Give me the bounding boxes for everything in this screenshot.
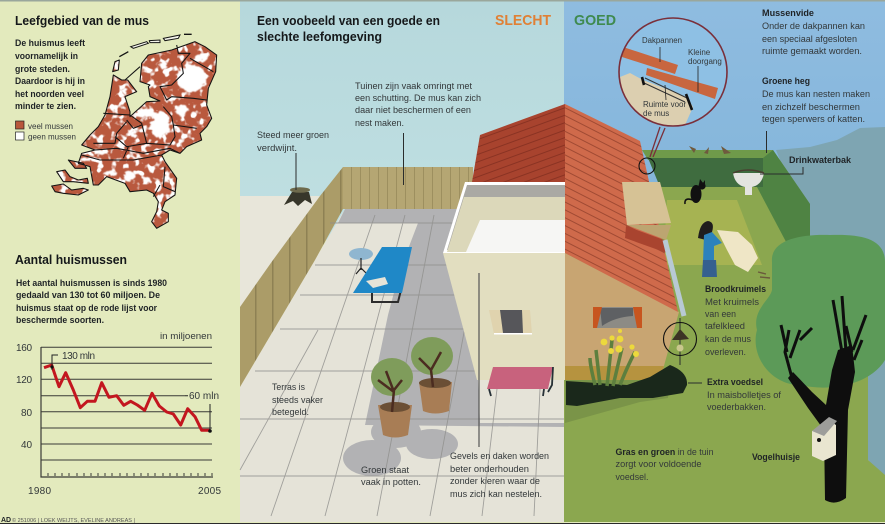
trunk and branches (781, 296, 866, 503)
y-axis labels: 40 (21, 440, 32, 451)
annotation: 130 mln (50, 351, 95, 370)
left roof (472, 104, 565, 182)
note: steed meer groen: Steed meer groen (257, 130, 329, 140)
house shadow on terrace (338, 209, 565, 427)
panel: leefgebied map (15, 13, 223, 233)
note: mussenvide: Onder de dakpannen kan (762, 21, 865, 31)
grid and axes (41, 347, 213, 477)
x-axis labels (28, 486, 221, 497)
sparrows on hedge (689, 146, 731, 154)
label: Ruimte voor de mus: Ruimte voor (643, 100, 686, 109)
label: vogelhuisje: Vogelhuisje (752, 452, 800, 462)
intro text: minder te zien. (15, 101, 76, 111)
right wall (565, 253, 679, 380)
pink bench (487, 367, 553, 396)
woman shaking tablecloth (698, 221, 758, 277)
right roof (565, 104, 678, 312)
magnifier: mussenvide detail (619, 18, 727, 174)
intro text: grote steden. (15, 64, 70, 74)
note: schutting: daar niet beschermen of een (355, 105, 471, 115)
label: Kleine doorgang: doorgang (688, 57, 722, 66)
note: mussenvide: Mussenvide (762, 8, 814, 18)
note: schutting: een schutting. De mus kan zich (355, 93, 481, 103)
left wall (443, 253, 565, 380)
note: groen in potten: vaak in potten. (361, 477, 421, 487)
note: gras en groen: zorgt voor voldoende (616, 459, 702, 469)
flat roof skylight (466, 220, 565, 252)
feeder circle with bird (664, 322, 696, 356)
note: broodkruimels: van een (705, 309, 736, 319)
chart intro text (16, 278, 167, 325)
note: gras en groen (616, 447, 714, 482)
red population line (44, 365, 210, 430)
flat roof grey band (447, 185, 565, 250)
annotation: 60 mln (185, 391, 219, 433)
hedge side (757, 150, 810, 255)
intro text: De huismus leeft (15, 38, 85, 48)
note: terras: Terras is (272, 382, 305, 392)
legend: veel mussen (28, 122, 73, 131)
potted tree 1 (371, 358, 413, 438)
x-axis labels: 1980 (28, 486, 51, 497)
note: terras: betegeld. (272, 407, 309, 417)
top edge (0, 0, 885, 2)
legend: geen mussen (28, 132, 76, 142)
note: extra voedsel (707, 377, 782, 412)
lawn ground (564, 187, 885, 522)
sky: goed side (564, 0, 885, 300)
x-axis labels: 2005 (198, 486, 221, 497)
wall plinth (565, 366, 664, 380)
line chart (16, 331, 221, 497)
label: GOED: GOED (574, 12, 616, 29)
pot shadows (343, 416, 458, 476)
flat roof floor (447, 197, 565, 252)
intro text: voornamelijk in (15, 51, 78, 61)
inner lawn (663, 200, 762, 265)
tile joints (240, 215, 565, 516)
hedge top (642, 150, 810, 235)
lens background (619, 18, 727, 126)
right window (593, 307, 642, 328)
annotation: 60 mln: 60 mln (189, 391, 219, 402)
note: terras: steeds vaker (272, 395, 323, 405)
lens contents (620, 47, 718, 126)
note: groene heg (762, 76, 870, 124)
bottom edge (0, 523, 885, 524)
note: schutting (355, 81, 481, 128)
note: mussenvide: een speciaal afgesloten (762, 34, 857, 44)
note: gevels en daken: mus zich kan nestelen. (450, 489, 542, 499)
y-axis labels: 120 (16, 375, 32, 386)
note: extra voedsel: voederbakken. (707, 402, 766, 412)
note: extra voedsel: Extra voedsel (707, 377, 763, 387)
note: broodkruimels: kan de mus (705, 334, 751, 344)
black flower bed (566, 365, 687, 406)
black cat (685, 179, 706, 204)
note: broodkruimels: Broodkruimels (705, 284, 766, 294)
heading: goede en slechte leefomgeving: Een voobeeld van een goede en (257, 13, 440, 28)
lens stem (650, 127, 665, 157)
ground beyond the fence (240, 196, 325, 310)
label: SLECHT: SLECHT (495, 12, 551, 29)
map of the Netherlands (47, 33, 223, 233)
chart intro text: gedaald van 130 tot 60 miljoen. De (16, 290, 160, 300)
note: broodkruimels: Met kruimels (705, 297, 760, 307)
dormer shadow (625, 226, 667, 253)
panel: aantal huismussen (15, 252, 221, 497)
intro text: Daardoor is hij in (15, 76, 85, 86)
potted tree 2 (411, 337, 453, 414)
chart intro text: beschermde soorten. (16, 315, 104, 325)
note: mussenvide (762, 8, 865, 56)
heading: goede en slechte leefomgeving: slechte leefomgeving (257, 29, 382, 44)
annotation: 130 mln: 130 mln (62, 351, 95, 362)
legend (16, 121, 76, 142)
note: groene heg: Groene heg (762, 76, 810, 86)
note: gevels en daken (450, 451, 549, 499)
tree with nest box (756, 235, 885, 503)
lens rim (619, 18, 727, 126)
garden shadow of house (565, 380, 670, 423)
y-axis labels (16, 343, 32, 451)
note: groene heg: De mus kan nesten maken (762, 89, 870, 99)
credit line: AD (1, 517, 11, 524)
note: groen in potten (361, 465, 421, 487)
credit line: © 251006 | LOEK WEIJTS, EVELINE ANDREAS | (12, 517, 135, 524)
panel: slecht garden scene (240, 167, 565, 522)
small detail circle (639, 158, 655, 174)
hedge front (648, 158, 763, 187)
intro text: het noorden veel (15, 89, 84, 99)
leader lines (296, 131, 803, 447)
daffodils (590, 329, 639, 386)
side table (349, 248, 373, 274)
note: gras en groen: voedsel. (616, 472, 648, 482)
panel: left column background (0, 0, 241, 524)
flat roof white border (443, 182, 565, 253)
note: gevels en daken: zonder kieren waar de (450, 476, 540, 486)
note: groene heg: en zichzelf beschermen (762, 102, 860, 112)
note: schutting: Tuinen zijn vaak omringt met (355, 81, 473, 91)
note: gras en groen: Gras en groen in de tuin (616, 447, 714, 457)
note: gevels en daken: Gevels en daken worden (450, 451, 549, 461)
side fence (240, 167, 343, 387)
heading: goede en slechte leefomgeving (257, 13, 440, 44)
panel: goed garden scene (564, 127, 885, 522)
distant hills (776, 127, 885, 480)
intro text (15, 38, 85, 111)
note: steed meer groen (257, 130, 329, 153)
sun lounger (353, 247, 412, 302)
note: terras (272, 382, 323, 417)
chart intro text: huismus staat op de rode lijst voor (16, 303, 157, 313)
note: gevels en daken: beter onderhouden (450, 464, 529, 474)
note: broodkruimels: overleven. (705, 347, 746, 357)
note: schutting: nest maken. (355, 118, 404, 128)
note: steed meer groen: verdwijnt. (257, 143, 297, 153)
crumbs (758, 272, 770, 278)
label: Dakpannen: Dakpannen (642, 36, 682, 45)
y-axis labels: 80 (21, 408, 32, 419)
dormer (622, 182, 671, 240)
note: groen in potten: Groen staat (361, 465, 410, 475)
y-axis labels: 160 (16, 343, 32, 354)
bird house (812, 417, 837, 461)
left window (489, 310, 532, 334)
terrace (240, 209, 565, 522)
gutter (665, 240, 684, 316)
house (443, 104, 687, 406)
heading: Aantal huismussen: Aantal huismussen (15, 252, 127, 267)
tree stump (284, 187, 312, 206)
note: extra voedsel: In maisbolletjes of (707, 390, 782, 400)
label: Ruimte voor de mus: de mus (643, 109, 669, 118)
label: drinkwaterbak: Drinkwaterbak (789, 155, 852, 165)
label: Kleine doorgang: Kleine (688, 48, 711, 57)
note: groene heg: tegen sperwers of katten. (762, 114, 865, 124)
chart intro text: Het aantal huismussen is sinds 1980 (16, 278, 167, 288)
back fence (343, 167, 473, 209)
bird bath (733, 170, 764, 195)
heading: Leefgebied van de mus: Leefgebied van de mus (15, 13, 149, 28)
note: broodkruimels (705, 284, 766, 357)
unit label: in miljoenen (160, 331, 212, 341)
note: mussenvide: ruimte gemaakt worden. (762, 46, 862, 56)
tree crown (756, 235, 885, 388)
sky: slecht side (240, 0, 565, 240)
note: broodkruimels: tafelkleed (705, 321, 745, 331)
